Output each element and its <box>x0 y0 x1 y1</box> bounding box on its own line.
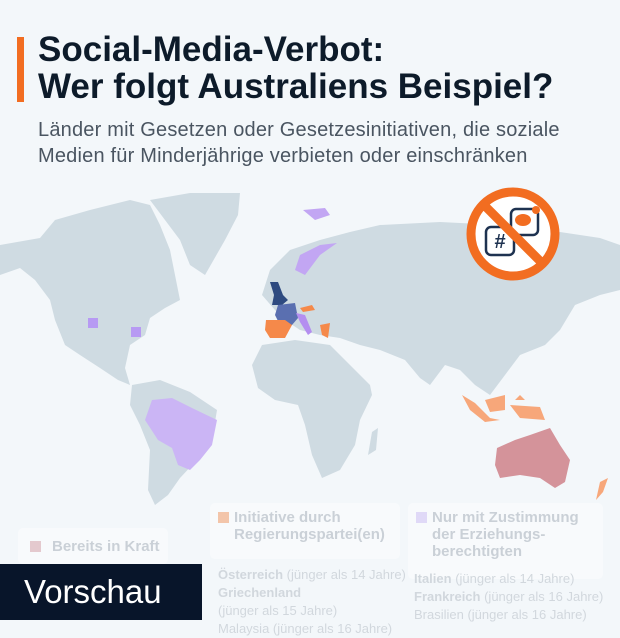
country list: initiative: Österreich (jünger als 14 Jahre) <box>218 567 406 582</box>
North America <box>0 200 180 385</box>
country list: parental: Frankreich (jünger als 16 Jahre) <box>414 589 603 604</box>
US squares <box>88 318 98 328</box>
Eurasia <box>262 222 620 395</box>
country list: parental: Italien (jünger als 14 Jahre) <box>414 571 574 586</box>
legend: Zustimmung: Nur mit Zustimmung <box>432 509 579 526</box>
Vorschau label: Vorschau <box>24 573 162 610</box>
Austria <box>300 305 315 312</box>
subtitle: Länder mit Gesetzen oder Gesetzesinitiativen, die soziale <box>38 119 560 141</box>
title <box>38 30 553 106</box>
country list: initiative: (jünger als 15 Jahre) <box>218 603 337 618</box>
legend: Initiative: Initiative durch <box>234 509 341 526</box>
country list: initiative <box>218 567 406 636</box>
France striped <box>275 303 298 325</box>
New Zealand <box>596 478 608 500</box>
legend: Initiative <box>210 503 400 559</box>
Vorschau label <box>0 564 202 620</box>
title: Wer folgt Australiens Beispiel? <box>38 67 553 106</box>
Italy <box>296 313 312 335</box>
Spain <box>265 320 292 338</box>
Africa <box>252 340 372 478</box>
Greenland <box>150 193 240 275</box>
subtitle: Medien für Minderjährige verbieten oder einschränken <box>38 145 528 167</box>
icon: no social media: # <box>494 231 506 253</box>
legend: bereits in Kraft <box>18 528 168 564</box>
country list: initiative: Malaysia (jünger als 16 Jahre) <box>218 621 392 636</box>
UK <box>270 282 288 305</box>
Indonesia <box>462 395 545 422</box>
Norway <box>295 243 337 275</box>
legend: Initiative: Regierungspartei(en) <box>234 526 385 543</box>
title accent bar <box>17 37 24 102</box>
South America <box>130 380 217 505</box>
legend: Zustimmung <box>408 503 603 579</box>
Greece <box>320 323 330 338</box>
subtitle <box>38 119 560 167</box>
country list: parental <box>414 571 603 622</box>
country list: initiative: Griechenland <box>218 585 301 600</box>
country list: parental: Brasilien (jünger als 16 Jahre) <box>414 607 587 622</box>
legend: bereits in Kraft: Bereits in Kraft <box>52 538 160 555</box>
Svalbard <box>303 208 330 220</box>
Brazil <box>145 398 217 470</box>
title: Social-Media-Verbot: <box>38 30 384 69</box>
icon: no social media <box>466 188 560 280</box>
legend: Zustimmung: berechtigten <box>432 543 522 560</box>
Australia <box>495 428 570 488</box>
Madagascar <box>368 428 378 455</box>
legend: Zustimmung: der Erziehungs- <box>432 526 545 543</box>
